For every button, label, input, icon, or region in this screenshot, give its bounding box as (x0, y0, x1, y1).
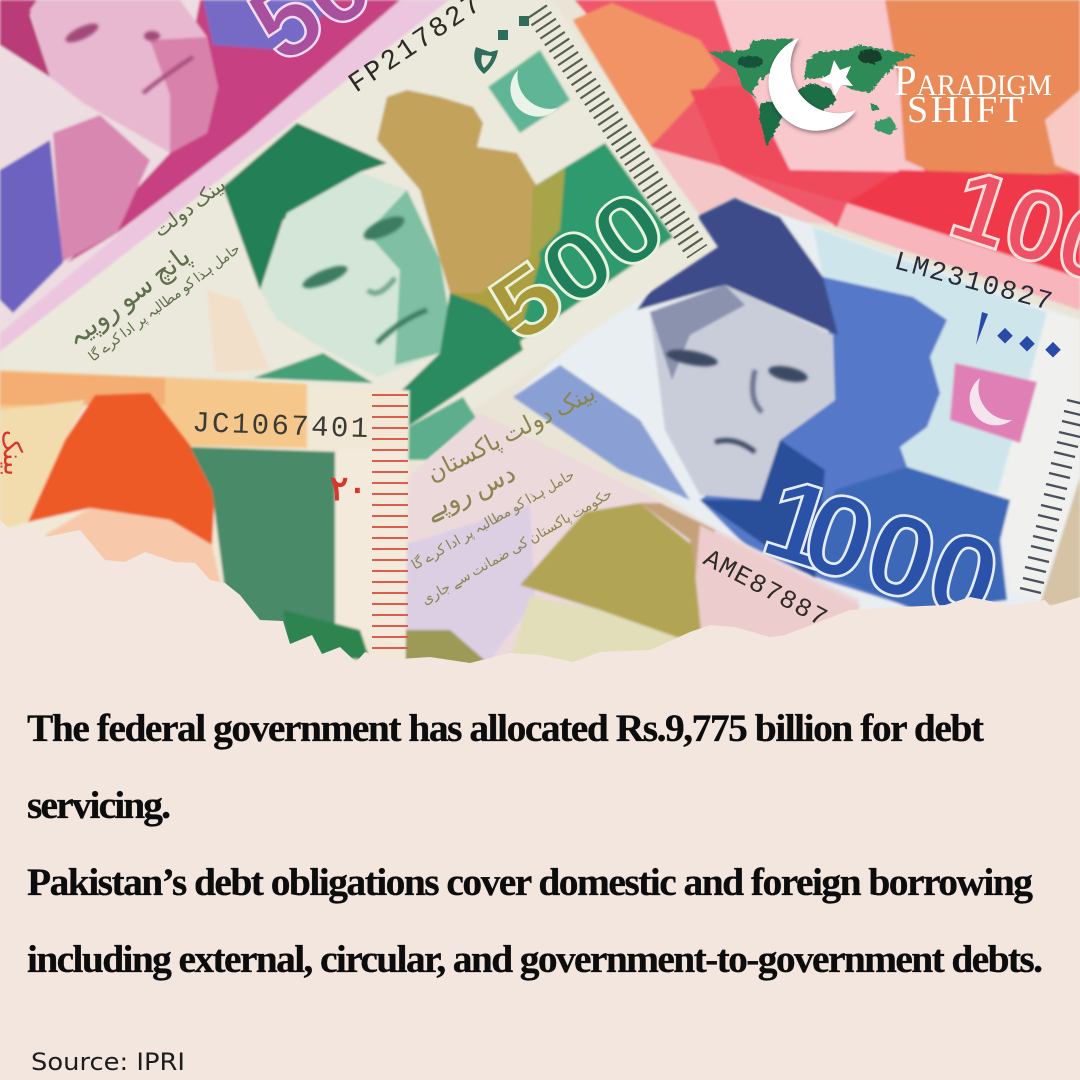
edge ticks (372, 395, 408, 648)
crescent on green flag (510, 70, 558, 117)
source: Source: IPRI (31, 1048, 185, 1076)
Urdu text on pink note: دس روپے (418, 453, 521, 527)
denomination marks (976, 312, 1061, 357)
line 3: Pakistan’s debt obligations cover domestic and foreign borrowing (27, 860, 1033, 904)
body text (27, 706, 1043, 981)
banknote: red 100 rupee (573, 0, 1080, 310)
face details: blue note (665, 347, 809, 452)
icon: world map (709, 38, 915, 147)
Urdu text on pink note: حامل ہذا کو مطالبہ پر ادا کرے گا (408, 464, 578, 574)
logo: Paradigm Shift (709, 38, 1052, 147)
logo word: Shift: SHIFT (907, 89, 1023, 131)
Urdu text on green note: پانچ سو روپیہ (56, 235, 197, 354)
serial number LM2310827: LM2310827 (891, 248, 1057, 319)
Urdu text on pink note: حکومت پاکستان کی ضمانت سے جاری (418, 483, 616, 609)
Urdu text on pink note: بینک دولت پاکستان (419, 373, 601, 488)
icon: crescent (769, 38, 856, 131)
banknote: pink and olive 10 rupee (400, 373, 860, 670)
face details: green note (300, 212, 427, 343)
denomination symbol: ٢٠ (330, 470, 367, 508)
serial number AME87887: AME87887 (698, 544, 833, 634)
serial number JC1067401: JC1067401 (192, 407, 369, 446)
line 1: The federal government has allocated Rs.9,775 billion for debt (27, 706, 984, 750)
torn paper panel (0, 520, 1080, 1080)
photo of banknotes (0, 0, 1080, 680)
edge ticks (1020, 400, 1080, 593)
denomination 1000: 000 (788, 466, 1014, 647)
denomination 1000: 1 (749, 453, 849, 594)
denomination marks: 500 in Urdu (474, 16, 529, 74)
Urdu text on green note (56, 169, 244, 366)
banknote: orange 20 rupee (0, 370, 410, 670)
banknote: blue 1000 rupee (513, 198, 1080, 647)
denomination 500: 500 (471, 170, 684, 363)
banknote: purple 50 rupee (0, 0, 470, 355)
Urdu text on green note: بینک دولت (146, 169, 231, 243)
Urdu text on pink note (408, 373, 616, 609)
line 2: servicing. (27, 783, 171, 827)
icon: star (820, 60, 853, 96)
crescent on pink flag (970, 378, 1012, 425)
line 4: including external, circular, and government-to-government debts. (27, 937, 1043, 981)
banknote: green 500 rupee (0, 0, 718, 470)
logo word: Paradigm: PARADIGM (894, 58, 1052, 105)
edge ticks (536, 11, 697, 252)
Urdu text on green note: حامل ہذا کو مطالبہ پر ادا کرے گا (84, 238, 244, 366)
face details: purple note (63, 20, 193, 93)
